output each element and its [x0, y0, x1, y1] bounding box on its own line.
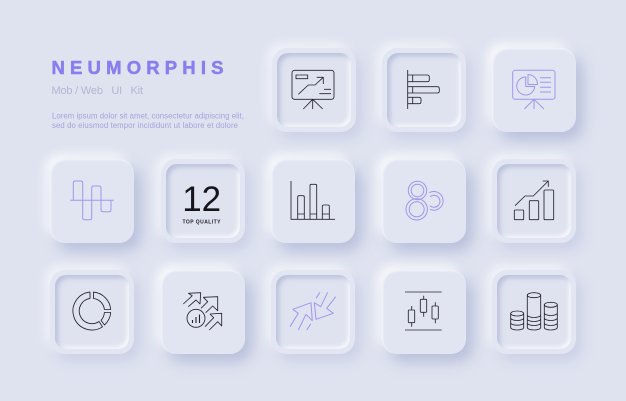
- panel: coin stacks: [492, 270, 576, 354]
- panel: bar chart: [271, 159, 355, 243]
- icon: candlestick chart: [405, 292, 442, 330]
- icon: stacks of coins: [510, 292, 558, 330]
- panel: pie presentation: [492, 48, 576, 132]
- icon: board with pie chart: [512, 70, 556, 110]
- icon: horizontal bar chart: [407, 70, 440, 109]
- subtitle: Mob / Web UI Kit: [52, 85, 143, 97]
- icon: bars with rising arrow: [514, 180, 554, 220]
- description: sed do eiusmod tempor incididunt ut labore et dolore: [52, 121, 238, 130]
- icon: positive and negative bars: [70, 180, 114, 220]
- description: [52, 112, 244, 130]
- icon: vertical bar chart: [290, 181, 335, 220]
- icon: presentation board with rising arrow: [292, 70, 334, 110]
- panel: number 12: [161, 159, 245, 243]
- icon: top quality badge: 12: [182, 180, 221, 219]
- heading block: [52, 57, 244, 130]
- panel: donut: [50, 270, 134, 354]
- panel: growth bars: [492, 159, 576, 243]
- title: NEUMORPHIS: [52, 57, 224, 78]
- icon: opposing arrows: [290, 292, 336, 330]
- icon: top quality badge: TOP QUALITY: [182, 220, 221, 226]
- icon: three up arrows with circular chart: [183, 292, 222, 330]
- panel: linked rings: [382, 159, 466, 243]
- icon: ring figure: [406, 180, 444, 220]
- panel: candlesticks: [382, 270, 466, 354]
- panel: horizontal bars: [382, 48, 466, 132]
- icon: donut chart: [72, 292, 112, 330]
- panel: colliding arrows: [271, 270, 355, 354]
- panel: up-down bars: [50, 159, 134, 243]
- panel: presentation growth chart: [272, 48, 356, 132]
- panel: arrows and chart coin: [161, 270, 245, 354]
- description: Lorem ipsum dolor sit amet, consectetur adipiscing elit,: [52, 112, 244, 120]
